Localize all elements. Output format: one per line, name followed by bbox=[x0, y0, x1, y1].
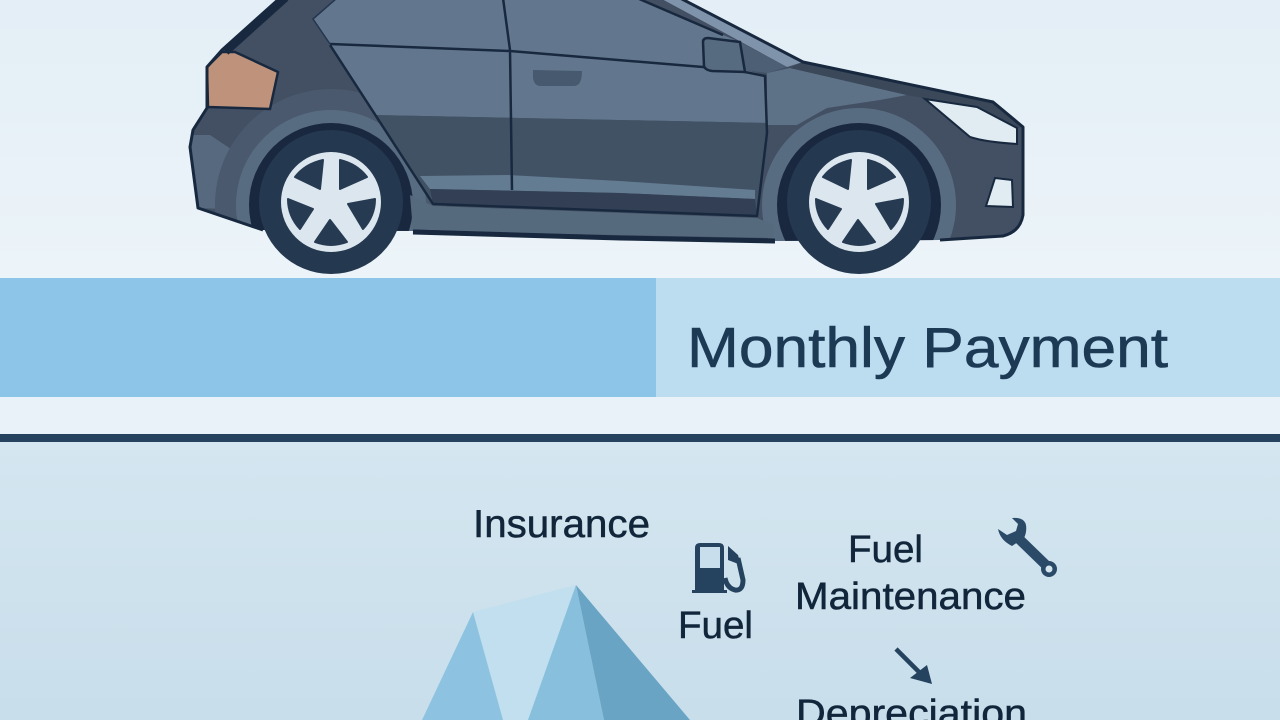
lower sill bbox=[410, 195, 774, 238]
window rear edge bbox=[313, 0, 337, 44]
headlight bbox=[925, 99, 1017, 144]
door handle bbox=[533, 70, 582, 86]
door highlight strip bbox=[420, 175, 755, 199]
car outline bbox=[190, 0, 1023, 240]
label: insurance: Insurance bbox=[473, 503, 650, 546]
sill dark band bbox=[430, 189, 757, 216]
label: fuel maintenance: Maintenance bbox=[795, 576, 1026, 618]
label: fuel maintenance: Fuel bbox=[848, 529, 923, 571]
body shading and fender bands bbox=[192, 68, 956, 241]
door and window lines bbox=[330, 0, 767, 216]
light bar segment bbox=[656, 278, 1280, 397]
rear wheel bbox=[259, 130, 403, 274]
upper door and window panel bbox=[313, 0, 767, 123]
arrow bbox=[896, 649, 932, 684]
front wheel bbox=[787, 130, 931, 274]
a-pillar strip bbox=[660, 0, 803, 67]
mirror bbox=[703, 38, 745, 72]
hood dark band bbox=[790, 62, 1023, 128]
bar label: Monthly Payment bbox=[687, 316, 1168, 380]
fog light bbox=[986, 178, 1013, 207]
icon: fuel pump bbox=[692, 543, 743, 593]
label: fuel: Fuel bbox=[678, 605, 753, 647]
label: fuel maintenance bbox=[795, 529, 1026, 618]
monthly payment bar bbox=[0, 278, 1280, 397]
sill bottom line bbox=[413, 232, 775, 241]
car illustration bbox=[188, 0, 1024, 274]
filled bar segment bbox=[0, 278, 656, 397]
tail light bbox=[207, 52, 278, 109]
waterline divider bbox=[0, 434, 1280, 442]
roof rear band bbox=[226, 0, 286, 52]
iceberg bbox=[422, 585, 690, 720]
car body base bbox=[190, 0, 1023, 241]
lower door band bbox=[375, 115, 767, 216]
icon: wrench bbox=[998, 518, 1057, 577]
cowl panel bbox=[740, 42, 787, 73]
